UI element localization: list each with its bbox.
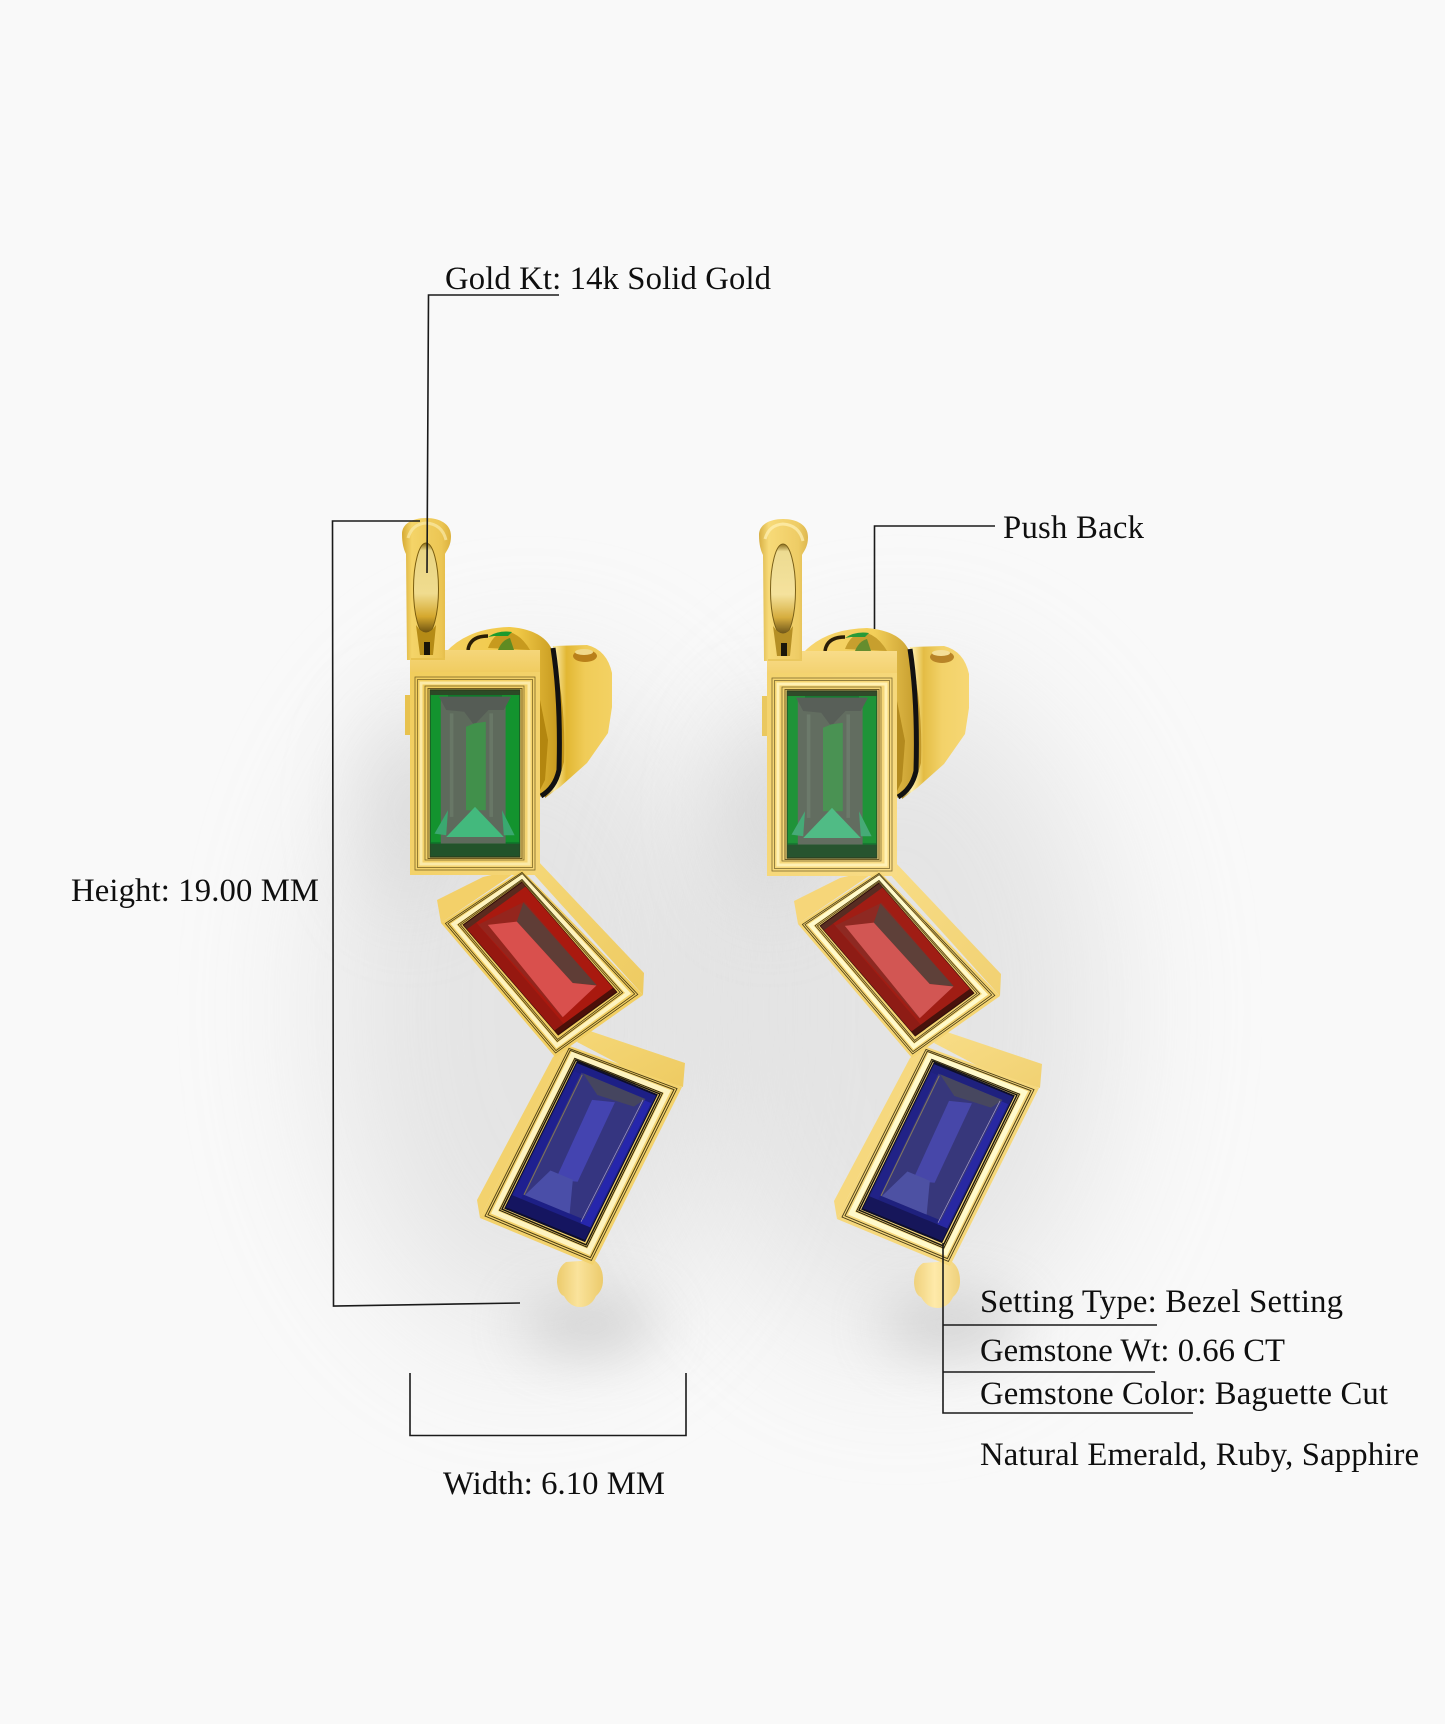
- ruby plate: [441, 870, 643, 1057]
- annotation: gold karat: [427, 261, 771, 573]
- sapphire side faces: [577, 1030, 685, 1087]
- ruby bezel rings: [445, 872, 638, 1053]
- height label: Height: 19.00 MM: [71, 873, 319, 909]
- width bracket: [410, 1373, 686, 1436]
- emerald setting: [405, 672, 540, 875]
- gemstone weight label: Gemstone Wt: 0.66 CT: [980, 1333, 1285, 1369]
- setting type label: Setting Type: Bezel Setting: [980, 1284, 1343, 1320]
- push back leader line: [874, 526, 995, 629]
- sapphire setting: [477, 1030, 685, 1265]
- gold karat leader line: [427, 295, 559, 573]
- annotation: push back: [874, 510, 1145, 629]
- soft shadows under earrings: [330, 680, 1110, 1355]
- height bracket: [332, 521, 520, 1306]
- annotation: gemstone details: [943, 1243, 1419, 1473]
- right earring: [759, 519, 1042, 1308]
- push back label: Push Back: [1003, 510, 1145, 546]
- plate top surface: [410, 650, 540, 674]
- back post disc: [446, 627, 564, 797]
- ruby gem: [463, 882, 617, 1035]
- ear hook: [402, 518, 451, 674]
- red setting side faces: [437, 860, 644, 995]
- sapphire bezel rings: [485, 1048, 677, 1260]
- gold karat label: Gold Kt: 14k Solid Gold: [445, 261, 771, 297]
- width label: Width: 6.10 MM: [443, 1466, 665, 1502]
- end ball: [557, 1260, 603, 1307]
- annotation: width: [410, 1373, 686, 1502]
- details leader lines: [943, 1243, 1193, 1413]
- ruby setting: [441, 870, 643, 1057]
- emerald gem: [430, 690, 520, 857]
- natural stones label: Natural Emerald, Ruby, Sapphire: [980, 1437, 1419, 1473]
- sapphire gem: [505, 1062, 657, 1241]
- left earring: [402, 518, 685, 1307]
- gemstone color label: Gemstone Color: Baguette Cut: [980, 1376, 1388, 1412]
- back clutch: [545, 645, 612, 798]
- green plate: [405, 672, 540, 875]
- sapphire plate: [480, 1045, 682, 1265]
- annotation: height: [71, 521, 520, 1306]
